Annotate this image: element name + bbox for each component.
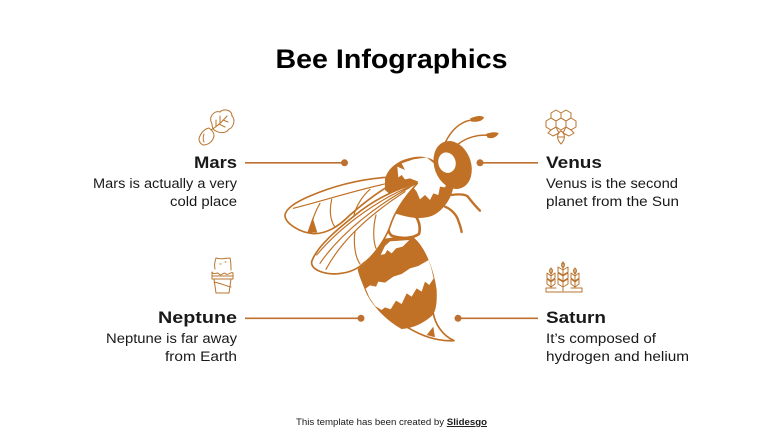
antennae <box>446 116 499 144</box>
panel: Mars <box>93 153 237 209</box>
bee illustration <box>285 116 499 341</box>
heading: Venus: Venus <box>546 153 602 172</box>
title: Bee Infographics <box>276 44 508 74</box>
lower wing <box>312 183 417 274</box>
thorax highlight <box>397 157 448 200</box>
icon: honeycomb and bee <box>546 110 576 144</box>
abdomen top highlight <box>381 240 409 255</box>
head <box>427 136 478 194</box>
heading: Mars: Mars <box>194 153 237 172</box>
text: Venus description: planet from the Sun <box>546 194 679 209</box>
abdomen <box>358 237 436 328</box>
text: Saturn description <box>546 331 689 364</box>
text: Venus description: Venus is the second <box>546 176 678 191</box>
icon: honey bucket <box>212 258 233 293</box>
icon: wheat <box>546 262 582 292</box>
thorax <box>385 157 453 218</box>
legs <box>445 194 480 232</box>
text: Venus description <box>546 176 679 209</box>
connector: Neptune <box>245 315 364 322</box>
text: Saturn description: It’s composed of <box>546 331 656 346</box>
icon: turnip and leaf <box>199 110 234 145</box>
upper wing <box>285 177 387 234</box>
waist segment <box>388 212 420 238</box>
stinger <box>407 313 454 341</box>
footer credit: This template has been created by Slidesgo <box>296 417 487 428</box>
text: Neptune description: from Earth <box>165 349 237 364</box>
connector: Venus <box>476 159 538 166</box>
text: Mars description <box>93 176 237 209</box>
text: Saturn description: hydrogen and helium <box>546 349 689 364</box>
panel: Venus <box>546 153 679 209</box>
text: Neptune description: Neptune is far away <box>106 331 237 346</box>
text: Mars description: Mars is actually a very <box>93 176 237 191</box>
text: Neptune description <box>106 331 237 364</box>
connector: Mars <box>245 159 348 166</box>
heading: Saturn: Saturn <box>546 308 606 327</box>
connector: Saturn <box>454 315 538 322</box>
abdomen white band <box>366 260 434 310</box>
text: Mars description: cold place <box>170 194 237 209</box>
panel: Saturn <box>546 308 689 364</box>
eye <box>436 150 458 175</box>
heading: Neptune: Neptune <box>158 308 237 327</box>
panel: Neptune <box>106 308 237 364</box>
